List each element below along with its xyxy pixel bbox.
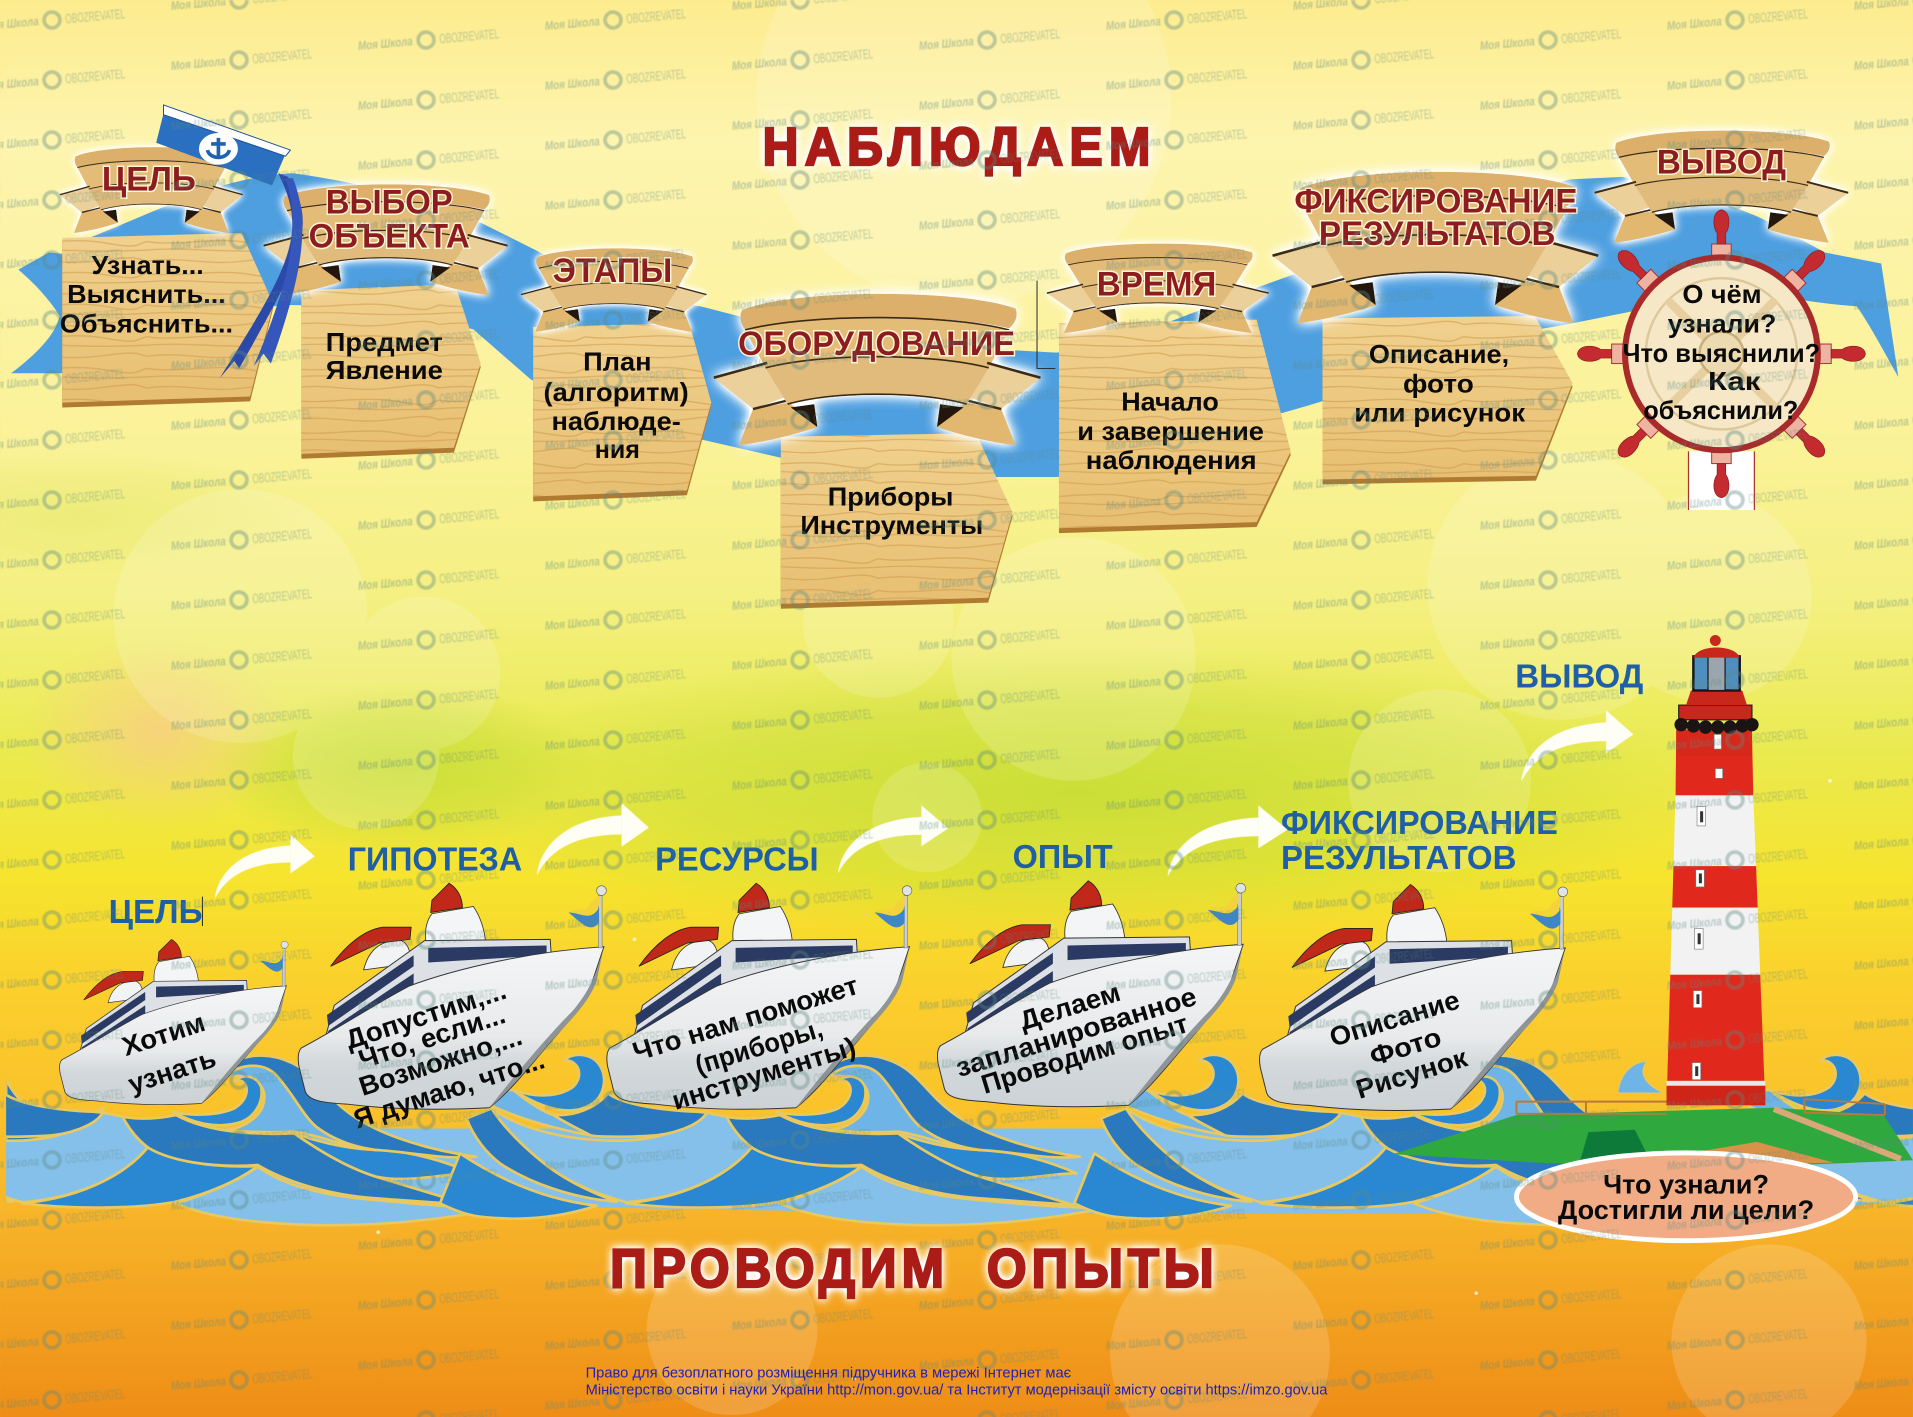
labels over ships: РЕЗУЛЬТАТОВ: [1281, 839, 1516, 876]
ship text: goal: узнать: [124, 1043, 220, 1099]
footer credit: Право для безоплатного розміщення підручника в мережі Інтернет має: [586, 1365, 1072, 1381]
ship text: hypothesis: Я думаю, что...: [350, 1044, 548, 1134]
arrows between steps: [215, 710, 1633, 899]
text: time: и завершение: [1077, 418, 1264, 446]
text: goal: Узнать...: [92, 252, 204, 280]
text: goal: [60, 252, 233, 339]
text: equipment: [800, 484, 983, 540]
ship text: resources: [629, 970, 862, 1116]
text: conclusion: Что выяснили?: [1623, 340, 1820, 368]
labels over ships: ОПЫТ: [1013, 838, 1113, 875]
sign board: stages: [533, 323, 711, 501]
text: equipment: Инструменты: [800, 512, 983, 540]
step: equipment: [714, 294, 1041, 609]
step: stages: [521, 248, 711, 501]
heading: ФИКСИРОВАНИЕ РЕЗУЛЬТАТОВ: РЕЗУЛЬТАТОВ: [1319, 215, 1556, 253]
text: conclusion: [1623, 281, 1820, 425]
stray black guide lines: [1037, 281, 1055, 368]
ship: recording: [1260, 884, 1568, 1110]
callout ellipse: Что узнали?: [1603, 1170, 1769, 1200]
ship text: hypothesis: Допустим,...: [342, 975, 510, 1055]
footer credit: [586, 1365, 1328, 1398]
text: results: или рисунок: [1354, 400, 1525, 428]
ship text: hypothesis: [342, 975, 548, 1134]
labels over ships: ФИКСИРОВАНИЕ: [1281, 804, 1558, 841]
icon: sailor hat with ribbons: [156, 105, 303, 378]
section: observation steps: [11, 105, 1898, 609]
text: object: Предмет: [326, 329, 443, 357]
text: conclusion: узнали?: [1668, 311, 1776, 339]
ship text: goal: Хотим: [118, 1007, 209, 1062]
wheel post: [1688, 451, 1754, 510]
labels over ships: ВЫВОД: [1515, 657, 1643, 694]
sign board: equipment: [781, 433, 1013, 609]
banner: conclusion: [1595, 131, 1848, 243]
banner: stages: [521, 248, 706, 332]
heading: ЭТАПЫ: ЭТАПЫ: [553, 252, 672, 290]
banner: equipment: [714, 294, 1041, 445]
text: stages: План: [583, 348, 652, 376]
text: equipment: Приборы: [828, 484, 953, 512]
banner: goal: [60, 147, 243, 233]
ship: resources: [607, 883, 912, 1116]
text: goal: Выяснить...: [67, 281, 226, 309]
step: goal: [60, 147, 273, 407]
sign board: goal: [62, 233, 273, 407]
banner: time: [1047, 244, 1269, 333]
ship text: hypothesis: Возможно,...: [355, 1021, 526, 1102]
text: results: Описание,: [1369, 341, 1509, 369]
labels over ships: РЕСУРСЫ: [655, 840, 819, 877]
ship text: recording: Рисунок: [1352, 1042, 1471, 1105]
ship text: resources: Что нам поможет: [629, 970, 862, 1067]
text: conclusion: объяснили?: [1643, 397, 1798, 425]
heading: ЦЕЛЬ: ЦЕЛЬ: [102, 160, 196, 198]
heading: ВЫБОР ОБЪЕКТА: ВЫБОР: [326, 184, 453, 222]
text: stages: ния: [595, 436, 640, 464]
heading: ФИКСИРОВАНИЕ РЕЗУЛЬТАТОВ: [1294, 182, 1577, 253]
ship: hypothesis: [298, 883, 606, 1134]
heading: ВРЕМЯ: ВРЕМЯ: [1097, 265, 1216, 303]
ship text: recording: Фото: [1366, 1022, 1445, 1072]
ship text: experiment: Проводим опыт: [978, 1008, 1192, 1100]
ship text: resources: (приборы,: [691, 1013, 826, 1080]
labels over ships: ЦЕЛЬ: [109, 893, 203, 930]
heading: ВЫВОД: ВЫВОД: [1657, 143, 1786, 181]
sign board: object: [301, 284, 481, 459]
ship text: goal: [118, 1007, 220, 1099]
text: time: [1077, 389, 1264, 475]
heading: ВЫБОР ОБЪЕКТА: [309, 184, 470, 256]
footer credit: Міністерство освіти і науки України http://mon.gov.ua/ та Інститут модернізації змісту освіти https://imzo.gov.ua: [586, 1382, 1328, 1398]
sea waves: [0, 1055, 1913, 1225]
text: results: фото: [1403, 370, 1474, 398]
heading: ВЫБОР ОБЪЕКТА: ОБЪЕКТА: [309, 218, 470, 256]
ship text: experiment: Делаем: [1016, 977, 1124, 1036]
labels over ships: ГИПОТЕЗА: [348, 840, 522, 877]
banner: results: [1272, 172, 1598, 323]
ship wheel: [1577, 210, 1865, 498]
blue ribbon with swallow tails: [11, 173, 1898, 477]
text: stages: [544, 348, 689, 464]
ship: goal: [60, 939, 288, 1105]
callout ellipse: Достигли ли цели?: [1558, 1195, 1814, 1225]
banner: object: [264, 184, 508, 295]
sign board: results: [1322, 316, 1573, 484]
heading: ФИКСИРОВАНИЕ РЕЗУЛЬТАТОВ: ФИКСИРОВАНИЕ: [1294, 182, 1577, 220]
step: time: [1047, 244, 1291, 533]
title: НАБЛЮДАЕМ: НАБЛЮДАЕМ: [762, 116, 1151, 176]
text: results: [1354, 341, 1525, 428]
lighthouse: [1667, 635, 1765, 1105]
sign board: time: [1059, 320, 1291, 533]
step: choice of object: [264, 184, 508, 459]
ship text: resources: инструменты): [668, 1031, 859, 1116]
ship text: recording: [1326, 985, 1471, 1105]
text: object: Явление: [326, 357, 443, 385]
text: time: наблюдения: [1086, 447, 1257, 475]
heading: ОБОРУДОВАНИЕ: ОБОРУДОВАНИЕ: [738, 325, 1015, 363]
title: ПРОВОДИМ ОПЫТЫ: ПРОВОДИМ ОПЫТЫ: [610, 1238, 1214, 1299]
ship text: hypothesis: Что, если...: [355, 999, 509, 1075]
callout ellipse: [1516, 1153, 1856, 1241]
step: recording results: [1272, 172, 1598, 484]
text: stages: наблюде-: [551, 408, 681, 436]
text: object: [326, 329, 443, 385]
text: conclusion: Как: [1708, 368, 1761, 396]
text: goal: Объяснить...: [60, 311, 233, 339]
section: experiments: [0, 635, 1913, 1241]
ship text: recording: Описание: [1326, 985, 1463, 1053]
labels over ships: [109, 657, 1643, 930]
text: conclusion: О чём: [1682, 281, 1762, 309]
island: [1393, 1061, 1913, 1169]
text: time: Начало: [1121, 389, 1219, 417]
step: conclusion: [1577, 131, 1865, 510]
text: stages: (алгоритм): [544, 379, 689, 407]
ship text: experiment: запланированное: [952, 981, 1200, 1083]
ship: experiment: [937, 881, 1246, 1107]
